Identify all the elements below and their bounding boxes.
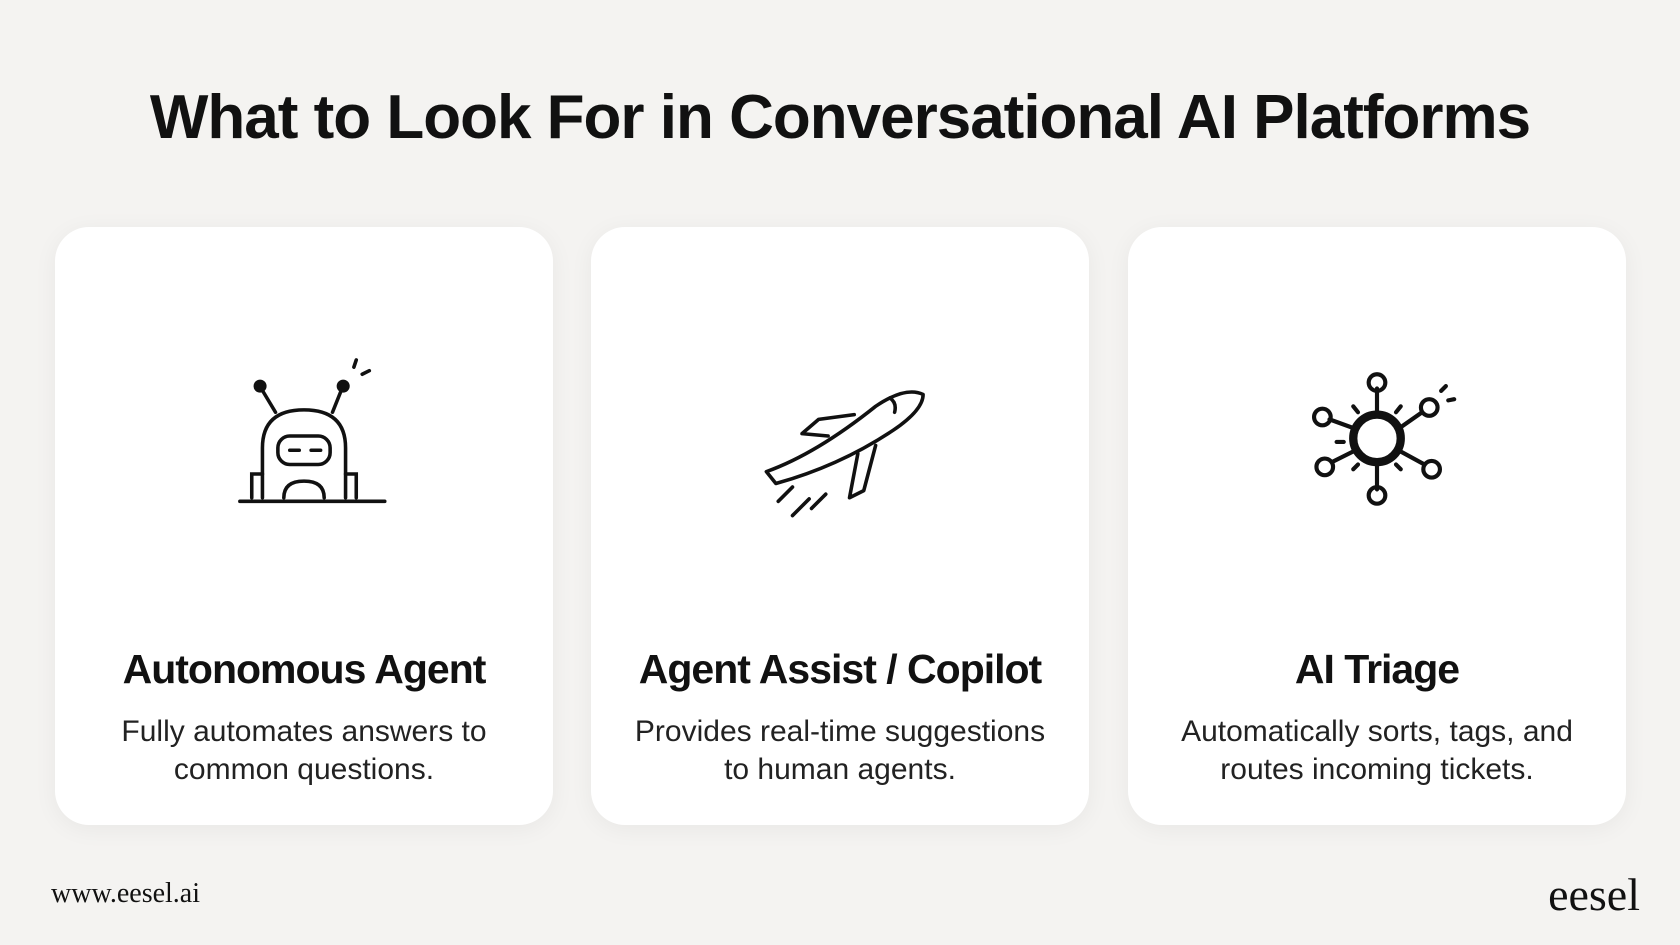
icon: network hub bbox=[1312, 372, 1456, 506]
icon: airplane bbox=[764, 390, 925, 518]
text: ai triage bbox=[1181, 715, 1573, 786]
text: agent assist: to human agents. bbox=[724, 753, 956, 786]
heading: agent assist: Agent Assist / Copilot bbox=[639, 646, 1041, 692]
panel: autonomous agent bbox=[55, 227, 553, 825]
footer logo: eesel bbox=[1548, 869, 1640, 920]
text: autonomous agent: Fully automates answers to bbox=[121, 715, 487, 748]
panel: ai triage bbox=[1128, 227, 1626, 825]
title: What to Look For in Conversational AI Platforms bbox=[150, 83, 1530, 152]
text: ai triage: Automatically sorts, tags, and bbox=[1181, 715, 1573, 748]
icon: robot bbox=[238, 358, 386, 504]
text: autonomous agent: common questions. bbox=[174, 753, 434, 786]
text: ai triage: routes incoming tickets. bbox=[1220, 753, 1534, 786]
text: agent assist bbox=[635, 715, 1045, 786]
panel: agent assist bbox=[591, 227, 1089, 825]
text: autonomous agent bbox=[121, 715, 487, 786]
heading: autonomous agent: Autonomous Agent bbox=[123, 646, 485, 692]
text: agent assist: Provides real-time suggestions bbox=[635, 715, 1045, 748]
heading: ai triage: AI Triage bbox=[1295, 646, 1459, 692]
footer url: www.eesel.ai bbox=[51, 878, 200, 909]
